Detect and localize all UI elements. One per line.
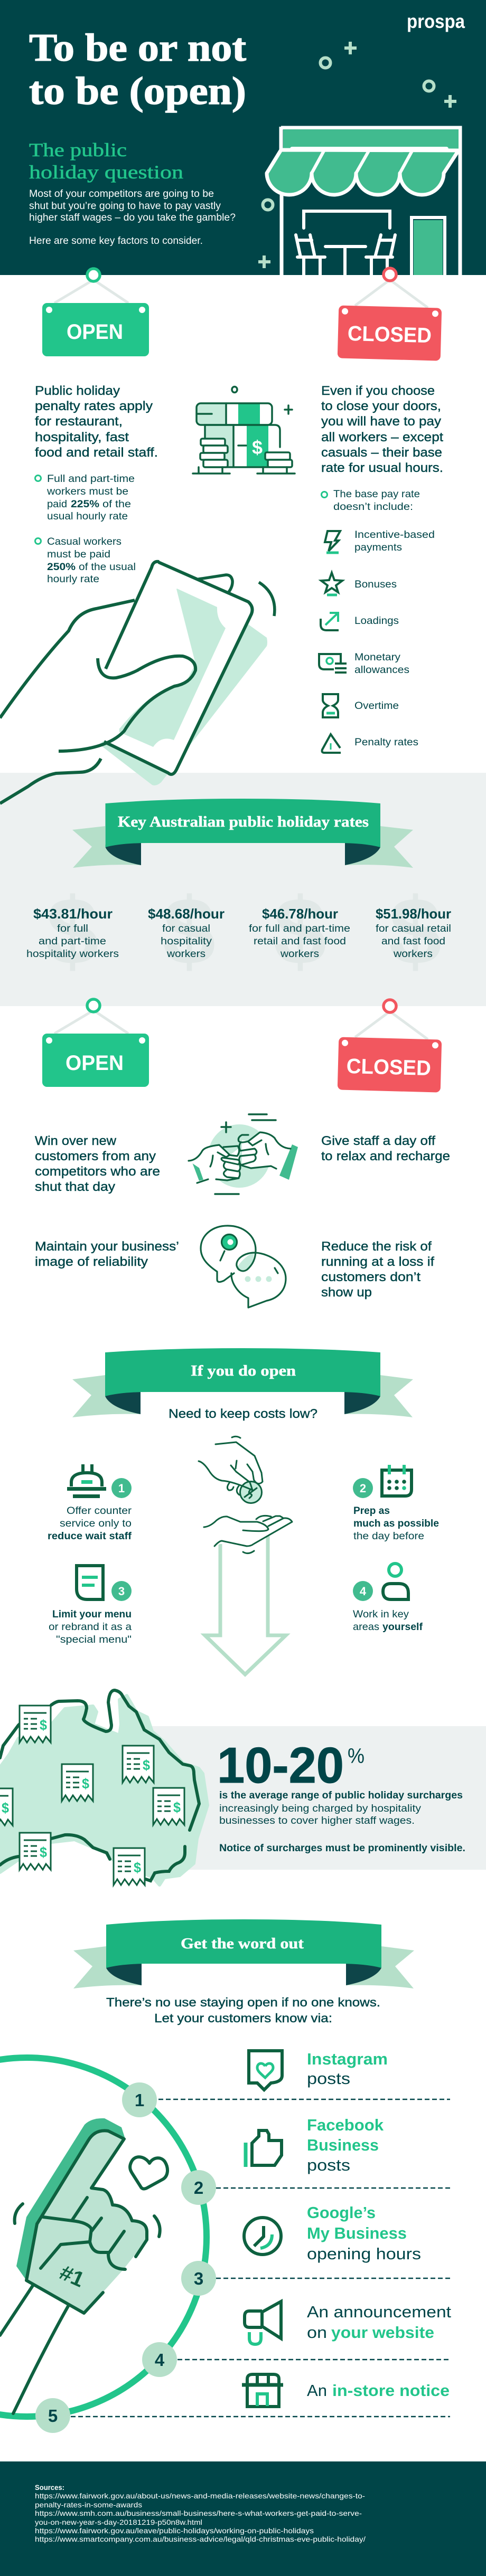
timeline: green arc xyxy=(0,2058,207,2417)
rate: full and part-time retail: for full and part-time xyxy=(249,923,350,934)
rate: casual hospitality: workers xyxy=(166,949,205,960)
step 1: counter service: service only to xyxy=(60,1518,132,1529)
text: give staff a day off xyxy=(321,1134,450,1163)
text: surcharge detail: increasingly being charged by hospitality xyxy=(219,1803,422,1814)
watermark: dollar signs: $ xyxy=(389,878,442,984)
step 2: prep ahead: much as possible xyxy=(353,1518,439,1529)
rate: casual retail: workers xyxy=(393,949,433,960)
sign: open (second): OPEN xyxy=(66,1052,124,1075)
receipt: $ xyxy=(143,1757,150,1773)
ribbon heading: get the word out: Get the word out xyxy=(181,1936,304,1952)
sign: open xyxy=(42,269,149,356)
text: give staff a day off: Give staff a day off xyxy=(321,1134,435,1148)
illustration: foam finger xyxy=(0,2118,167,2413)
step 2: prep ahead: the day before xyxy=(353,1531,424,1542)
item 2: facebook xyxy=(246,2116,384,2174)
item 5: in-store notice: An xyxy=(307,2381,327,2400)
title: To be or not xyxy=(29,26,246,70)
step 4: work yourself: 4 xyxy=(360,1585,367,1598)
step 1: counter service: reduce wait staff xyxy=(48,1531,132,1542)
text: surcharge detail: Notice of surcharges must be prominently visible. xyxy=(219,1843,465,1854)
item 3: google my business xyxy=(244,2203,421,2263)
panel: hero header xyxy=(0,0,486,275)
receipt xyxy=(20,1833,51,1870)
text: open column intro: Public holiday xyxy=(35,384,120,398)
intro text: Here are some key factors to consider. xyxy=(29,235,203,247)
arrow: downward outline xyxy=(205,1536,286,1674)
bullet: full and part-time rate: Full and part-time xyxy=(47,473,135,485)
text: win over customers xyxy=(35,1134,160,1194)
marker 1 xyxy=(122,2082,450,2117)
watermark: dollar signs: $ xyxy=(274,878,326,984)
rate: casual retail: and fast food xyxy=(381,936,445,947)
item 4: website announcement: on xyxy=(307,2323,327,2342)
step 3: limit menu: 3 xyxy=(118,1585,125,1598)
step 4: work yourself: Work in key xyxy=(353,1609,409,1620)
text: win over customers: competitors who are xyxy=(35,1164,160,1179)
marker 2: 2 xyxy=(194,2178,203,2198)
text: win over customers: customers from any xyxy=(35,1149,156,1163)
marker 1: 1 xyxy=(135,2090,144,2110)
stat: surcharge range: 10-20 xyxy=(217,1737,344,1794)
marker 4: 4 xyxy=(155,2350,165,2370)
intro text xyxy=(29,188,236,247)
item: monetary allowances: Monetary xyxy=(354,652,401,663)
item 5: in-store notice: in-store notice xyxy=(332,2381,450,2400)
panel: sources footer: https://www.fairwork.gov.au/leave/public-holidays/working-on-public-holidays xyxy=(35,2526,314,2535)
step 3: limit menu: Limit your menu xyxy=(52,1609,132,1620)
panel: sources footer: https://www.fairwork.gov.au/about-us/news-and-media-releases/website-news/changes-to- xyxy=(35,2492,365,2500)
marker 4 xyxy=(142,2342,450,2377)
step 2: prep ahead: 2 xyxy=(360,1482,366,1495)
item 3: google my business: Google’s xyxy=(307,2203,376,2222)
bullet: base pay exclusions: doesn’t include: xyxy=(333,501,413,513)
step 3: limit menu xyxy=(49,1566,132,1645)
item: loadings: Loadings xyxy=(354,615,399,627)
item: penalty rates xyxy=(322,734,418,753)
illustration: shopfront xyxy=(267,127,460,275)
marker 3: 3 xyxy=(194,2269,203,2288)
illustration: hand holding banknote xyxy=(0,561,275,803)
receipt: $ xyxy=(173,1800,181,1815)
text: surcharge detail: businesses to cover higher staff wages. xyxy=(219,1815,415,1826)
item 2: facebook: Business xyxy=(307,2136,379,2154)
item 4: website announcement: your website xyxy=(331,2323,434,2342)
rate: full and part-time hospitality: for full xyxy=(57,923,88,934)
rate: full and part-time hospitality: hospitality workers xyxy=(26,949,119,960)
rate: full and part-time retail: workers xyxy=(280,949,319,960)
panel: sources footer: penalty-rates-in-some-awards xyxy=(35,2501,142,2509)
item 4: website announcement: An announcement xyxy=(307,2303,451,2321)
receipt xyxy=(123,1746,154,1783)
item 1: instagram: posts xyxy=(307,2069,350,2088)
illustration: money and coins xyxy=(193,386,295,473)
text: maintain reliability: Maintain your business’ xyxy=(35,1239,179,1254)
watermark: dollar signs xyxy=(46,878,442,984)
logo: prospa: prospa xyxy=(407,11,465,32)
rate: casual retail: for casual retail xyxy=(376,923,451,934)
text: reduce the risk: customers don’t xyxy=(321,1270,420,1284)
rate: casual hospitality: $48.68/hour xyxy=(148,906,225,922)
watermark: dollar signs: $ xyxy=(46,878,99,984)
text: open column intro xyxy=(35,384,158,460)
item: bonuses xyxy=(321,573,397,595)
subtitle xyxy=(29,139,183,183)
panel: sources footer: Sources: xyxy=(35,2483,64,2492)
illustration: speech bubbles with pin xyxy=(201,1226,286,1308)
receipt: $ xyxy=(134,1860,141,1876)
bullet: base pay exclusions: The base pay rate xyxy=(333,489,420,500)
item: incentive-based payments xyxy=(325,529,435,553)
text: reduce the risk: show up xyxy=(321,1285,372,1300)
rate: casual retail: $51.98/hour xyxy=(376,906,451,922)
sign: open: OPEN xyxy=(67,320,123,344)
intro text: shut but you’re going to have to pay vastly xyxy=(29,201,221,212)
text: closed column intro: casuals – their base xyxy=(321,446,442,460)
receipt: $ xyxy=(82,1776,89,1792)
item: penalty rates: Penalty rates xyxy=(354,737,418,748)
ribbon heading: key rates xyxy=(72,799,413,868)
illustration: foam finger: #1 xyxy=(56,2261,88,2292)
receipt: $ xyxy=(2,1800,9,1816)
text: closed column intro: Even if you choose xyxy=(321,384,435,398)
sign: closed: CLOSED xyxy=(347,322,432,347)
step 4: work yourself: yourself xyxy=(382,1622,423,1633)
intro text: higher staff wages – do you take the gamble? xyxy=(29,212,236,223)
text: open column intro: food and retail staff. xyxy=(35,446,158,460)
text: closed column intro: you will have to pay xyxy=(321,414,442,429)
bullet: casual rate: hourly rate xyxy=(47,574,99,585)
bullet: base pay exclusions xyxy=(321,489,420,513)
ribbon heading: key rates: Key Australian public holiday rates xyxy=(118,814,369,830)
text: word out intro: Let your customers know via: xyxy=(154,2011,332,2025)
step 2: prep ahead xyxy=(353,1465,439,1542)
bullet: full and part-time rate: 225% xyxy=(71,499,99,510)
bullet: full and part-time rate: paid xyxy=(47,499,67,510)
text: give staff a day off: to relax and recharge xyxy=(321,1149,450,1163)
stat: surcharge range: % xyxy=(348,1745,364,1768)
subtitle: holiday question xyxy=(29,162,183,183)
subtitle: The public xyxy=(29,139,127,160)
sign: open (second) xyxy=(42,999,149,1087)
bullet: casual rate: 250% xyxy=(47,562,76,573)
text: word out intro xyxy=(106,1995,380,2025)
text: reduce the risk: Reduce the risk of xyxy=(321,1239,432,1254)
panel: sources footer: you-on-new-year-s-day-20181219-p50n8w.html xyxy=(35,2518,202,2526)
marker 5: 5 xyxy=(48,2406,58,2426)
bullet: full and part-time rate xyxy=(35,473,135,522)
ribbon heading: get the word out xyxy=(73,1919,414,1988)
text: maintain reliability: image of reliability xyxy=(35,1255,148,1269)
rate: casual retail xyxy=(376,906,451,960)
rate: casual hospitality xyxy=(148,906,225,960)
bullet: casual rate xyxy=(35,536,136,585)
bullet: casual rate: of the usual xyxy=(79,562,136,573)
text: closed column intro xyxy=(321,384,443,475)
panel: surcharge band xyxy=(143,1726,486,1870)
text: closed column intro: all workers – except xyxy=(321,430,443,444)
item 3: google my business: opening hours xyxy=(307,2244,421,2263)
panel: sources footer: https://www.smh.com.au/business/small-business/here-s-what-workers-get-paid-to-serve- xyxy=(35,2509,362,2517)
text: surcharge detail xyxy=(219,1790,465,1854)
rate: full and part-time retail: retail and fast food xyxy=(254,936,346,947)
step 1: counter service xyxy=(48,1464,132,1542)
panel: rates band xyxy=(0,773,486,1006)
item: overtime xyxy=(323,694,399,717)
bullet: casual rate: must be paid xyxy=(47,549,110,560)
step 3: limit menu: or rebrand it as a xyxy=(49,1622,132,1633)
rate: full and part-time retail: $46.78/hour xyxy=(262,906,338,922)
subheading: keep costs low: Need to keep costs low? xyxy=(169,1407,317,1421)
rate: casual hospitality: for casual xyxy=(162,923,210,934)
receipt xyxy=(20,1706,51,1742)
step 1: counter service: Offer counter xyxy=(67,1505,132,1517)
item 2: facebook: Facebook xyxy=(307,2116,384,2134)
bullet: full and part-time rate: usual hourly rate xyxy=(47,511,128,522)
text: open column intro: penalty rates apply xyxy=(35,399,153,413)
item 1: instagram: Instagram xyxy=(307,2050,388,2068)
receipt: $ xyxy=(40,1717,47,1733)
step 2: prep ahead: Prep as xyxy=(353,1505,390,1517)
step 4: work yourself xyxy=(353,1564,423,1633)
sign: closed (second) xyxy=(338,1000,442,1093)
rate: full and part-time hospitality: and part-time xyxy=(39,936,106,947)
rate: full and part-time hospitality xyxy=(26,906,119,960)
illustration: money and coins: $ xyxy=(252,437,263,458)
text: reduce the risk xyxy=(321,1239,434,1300)
bullet: full and part-time rate: of the xyxy=(102,499,131,510)
receipt xyxy=(153,1788,184,1825)
item: overtime: Overtime xyxy=(354,700,399,712)
bullet: casual rate: Casual workers xyxy=(47,536,121,547)
bullet: full and part-time rate: workers must be xyxy=(46,486,128,497)
receipt xyxy=(114,1848,145,1885)
ribbon heading: if you do open: If you do open xyxy=(191,1363,296,1379)
item 3: google my business: My Business xyxy=(307,2224,407,2242)
text: win over customers: shut that day xyxy=(35,1180,116,1194)
step 4: work yourself: areas xyxy=(353,1622,379,1633)
watermark: dollar signs: $ xyxy=(163,878,216,984)
item: monetary allowances xyxy=(319,652,409,676)
rate: full and part-time retail xyxy=(249,906,350,960)
marker 5 xyxy=(35,2398,450,2433)
text: closed column intro: rate for usual hours. xyxy=(321,461,443,475)
illustration: fist bump xyxy=(189,1114,298,1194)
sign: closed (second): CLOSED xyxy=(346,1055,431,1080)
step 1: counter service: 1 xyxy=(118,1482,125,1495)
title xyxy=(29,26,246,113)
intro text: Most of your competitors are going to be xyxy=(29,188,214,200)
receipt xyxy=(0,1788,13,1825)
text: reduce the risk: running at a loss if xyxy=(321,1255,434,1269)
item 4: website announcement xyxy=(245,2302,451,2344)
text: open column intro: hospitality, fast xyxy=(35,430,129,444)
receipt xyxy=(62,1764,93,1801)
text: surcharge detail: is the average range of public holiday surcharges xyxy=(219,1790,463,1801)
panel: sources footer xyxy=(0,2461,486,2576)
step 3: limit menu: "special menu" xyxy=(56,1634,132,1645)
list: base rate exclusions xyxy=(319,529,435,753)
text: open column intro: for restaurant, xyxy=(35,414,123,429)
item: incentive-based payments: Incentive-based xyxy=(354,529,435,541)
panel: sources footer: https://www.smartcompany.com.au/business-advice/legal/qld-christmas-eve-public-holiday/ xyxy=(35,2535,366,2543)
sign: closed xyxy=(338,268,442,361)
item 2: facebook: posts xyxy=(307,2156,350,2174)
item 5: in-store notice xyxy=(242,2374,450,2407)
item: monetary allowances: allowances xyxy=(354,665,409,676)
decorative plus and ring marks xyxy=(258,42,456,268)
text: word out intro: There’s no use staying open if no one knows. xyxy=(106,1995,380,2009)
title: to be (open) xyxy=(29,70,246,113)
marker 3 xyxy=(181,2261,450,2296)
rate: casual hospitality: hospitality xyxy=(161,936,212,947)
text: maintain reliability xyxy=(35,1239,179,1269)
item: loadings xyxy=(321,613,399,630)
ribbon heading: if you do open xyxy=(72,1348,413,1417)
text: win over customers: Win over new xyxy=(35,1134,116,1148)
receipt: $ xyxy=(40,1844,47,1860)
illustration: map of Australia with receipts xyxy=(0,1690,208,1885)
illustration: hand dropping coin into palm xyxy=(199,1436,292,1554)
item: incentive-based payments: payments xyxy=(354,542,402,553)
rate: full and part-time hospitality: $43.81/hour xyxy=(33,906,113,922)
item: bonuses: Bonuses xyxy=(354,579,397,590)
marker 2 xyxy=(181,2170,450,2205)
item 1: instagram xyxy=(249,2050,388,2090)
text: closed column intro: to close your doors, xyxy=(321,399,441,413)
